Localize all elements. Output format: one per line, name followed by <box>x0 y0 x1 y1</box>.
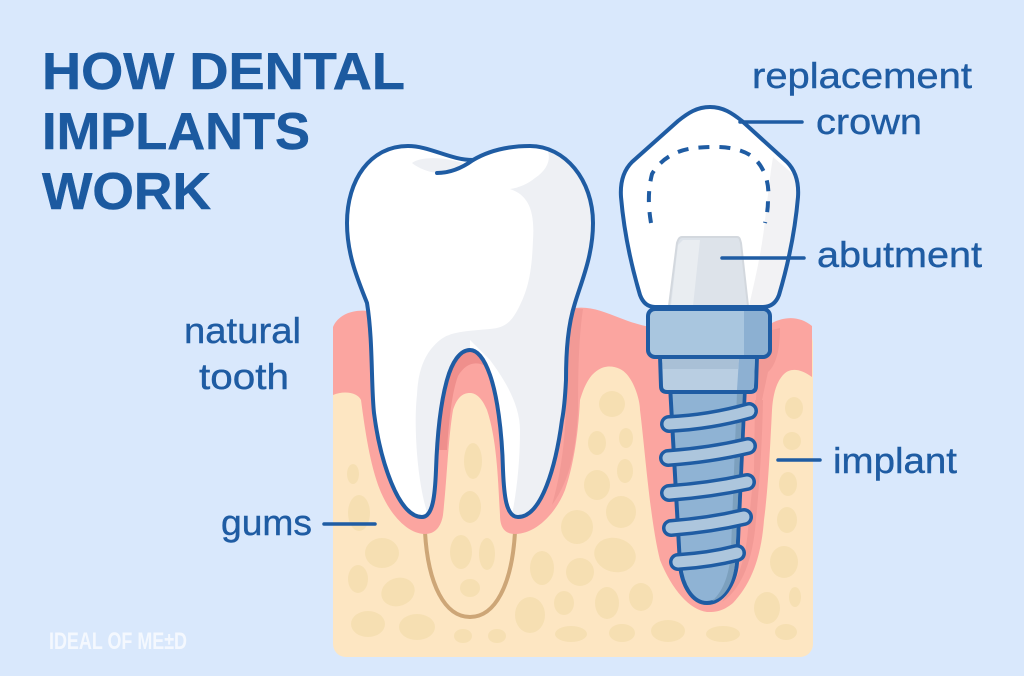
jaw bone cross-section <box>333 330 813 657</box>
label: replacement crown <box>740 55 972 142</box>
label: abutment: abutment <box>817 234 982 275</box>
natural tooth root canal outline <box>425 532 515 617</box>
label: replacement crown: crown <box>816 101 922 142</box>
label: replacement crown: replacement <box>752 55 972 96</box>
label: natural tooth: natural <box>184 310 301 351</box>
label: gums: gums <box>221 502 312 543</box>
label: natural tooth: tooth <box>199 356 289 397</box>
label: implant: implant <box>833 440 957 481</box>
title: WORK <box>42 163 211 221</box>
implant collar <box>648 309 770 357</box>
implant screw <box>668 385 749 603</box>
title: HOW DENTAL <box>42 43 405 101</box>
gums <box>333 308 812 612</box>
label: natural tooth <box>184 310 301 397</box>
dashed inner outline <box>649 147 768 223</box>
watermark: IDEAL OF ME±D <box>49 628 187 655</box>
title: IMPLANTS <box>42 103 310 161</box>
screw threads <box>668 411 749 562</box>
replacement crown <box>621 107 800 310</box>
natural tooth <box>347 146 610 530</box>
title <box>42 43 405 221</box>
implant neck <box>660 355 757 392</box>
abutment <box>669 237 748 306</box>
